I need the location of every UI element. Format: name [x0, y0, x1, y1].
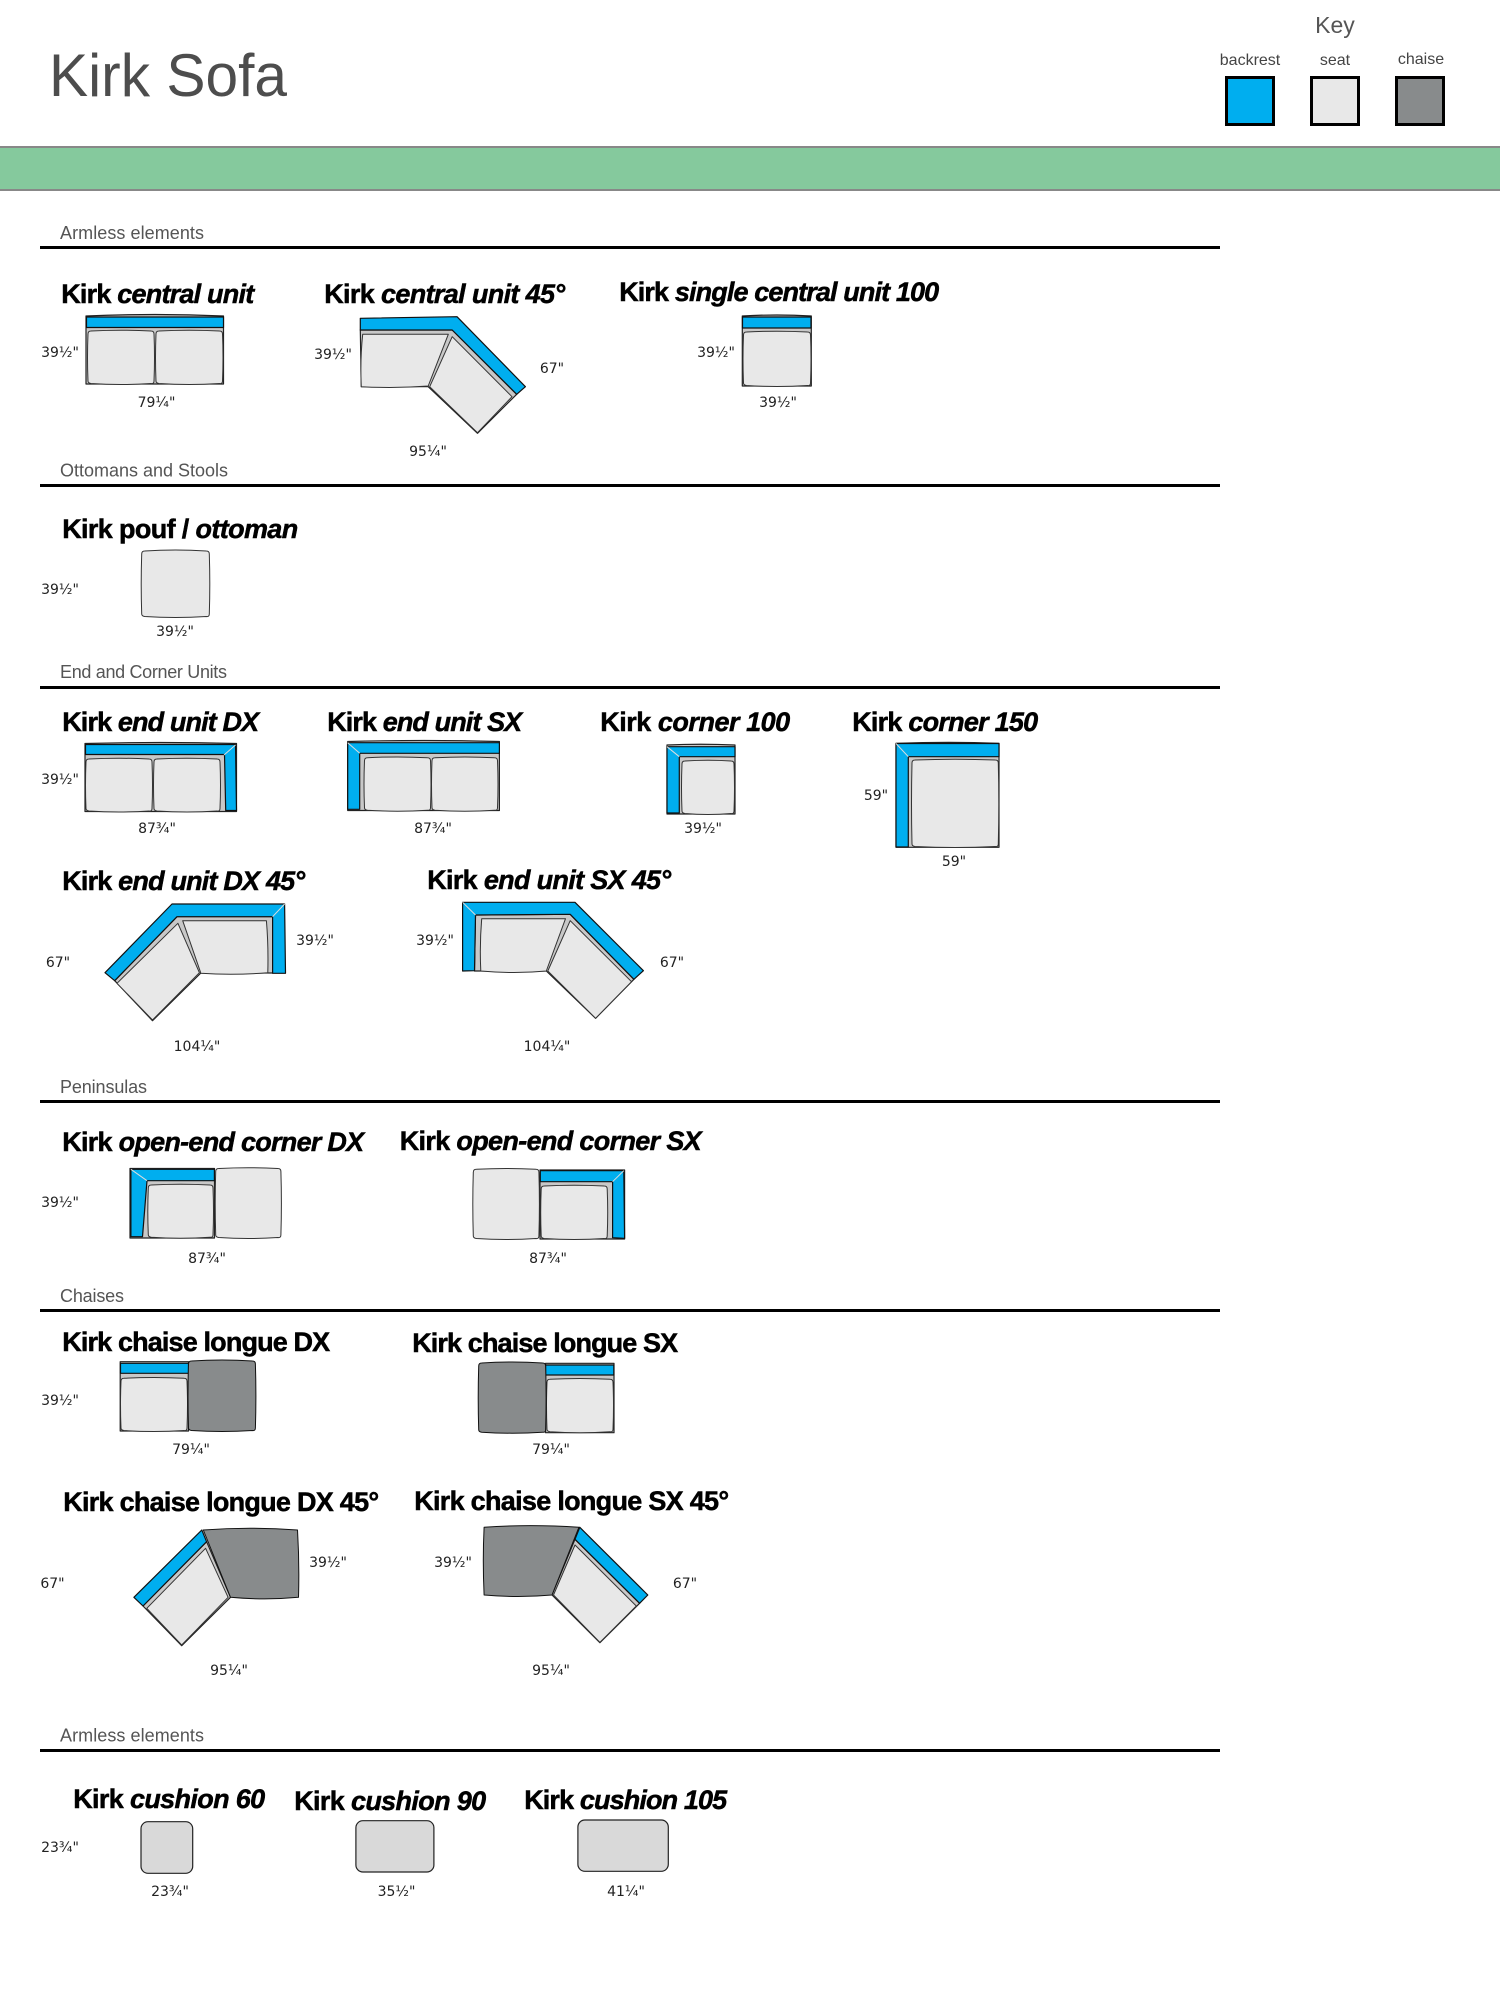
depth: 59"	[864, 788, 888, 804]
depth: 23¾"	[41, 1840, 79, 1856]
unit name: Kirk cushion 60	[73, 1784, 265, 1814]
depth: 39½"	[697, 345, 735, 361]
sofa plan	[348, 740, 499, 811]
unit: Kirk central unit 45	[314, 279, 565, 460]
width: 87¾"	[414, 821, 452, 837]
unit: Kirk corner 100	[600, 707, 790, 837]
unit: Kirk chaise longue DX	[41, 1327, 330, 1458]
sofa plan	[120, 1360, 256, 1432]
width: 79¼"	[532, 1442, 570, 1458]
unit name: Kirk chaise longue DX	[62, 1327, 330, 1357]
unit name: Kirk central unit	[61, 279, 255, 309]
unit name: Kirk end unit SX	[327, 707, 524, 737]
diagonal: 67"	[660, 955, 684, 971]
cushion plan	[141, 1822, 193, 1873]
key label: backrest: backrest	[1220, 52, 1281, 69]
unit: Kirk cushion 90	[294, 1786, 486, 1900]
depth: 39½"	[434, 1555, 472, 1571]
unit name: Kirk end unit SX 45°	[427, 865, 671, 895]
key label: chaise: chaise	[1398, 51, 1444, 68]
unit name: Kirk chaise longue DX 45°	[63, 1487, 379, 1517]
section heading: Armless elements: Armless elements	[60, 223, 204, 243]
unit name: Kirk cushion 90	[294, 1786, 486, 1816]
sofa plan	[134, 1528, 299, 1646]
sofa plan	[667, 744, 735, 814]
unit: Kirk end unit DX	[41, 707, 261, 837]
width: 104¼"	[174, 1039, 220, 1055]
unit: Kirk central unit	[41, 279, 255, 411]
unit name: Kirk chaise longue SX 45°	[414, 1486, 729, 1516]
unit: Kirk end unit SX	[327, 707, 524, 837]
depth: 39½"	[416, 933, 454, 949]
key swatch: backrest	[1226, 78, 1274, 124]
unit: Kirk chaise longue SX 45	[414, 1486, 729, 1679]
unit name: Kirk end unit DX	[62, 707, 261, 737]
cushion plan	[578, 1820, 668, 1871]
width: 95¼"	[532, 1663, 570, 1679]
depth: 39½"	[309, 1555, 347, 1571]
width: 23¾"	[151, 1884, 189, 1900]
unit: Kirk cushion 105	[524, 1785, 728, 1900]
unit: Kirk end unit DX 45	[46, 866, 334, 1055]
depth: 39½"	[314, 347, 352, 363]
width: 39½"	[759, 395, 797, 411]
unit name: Kirk single central unit 100	[619, 277, 939, 307]
unit: Kirk single central unit 100	[619, 277, 939, 411]
diagonal: 67"	[673, 1576, 697, 1592]
diagonal: 67"	[540, 361, 564, 377]
unit: Kirk end unit SX 45	[416, 865, 684, 1055]
unit: Kirk cushion 60	[41, 1784, 265, 1900]
sofa plan	[360, 317, 525, 433]
section heading: Armless elements (cushions): Armless elements	[60, 1726, 204, 1746]
width: 87¾"	[138, 821, 176, 837]
section heading: Chaises: Chaises	[60, 1286, 124, 1306]
sofa plan	[483, 1526, 648, 1643]
sofa plan	[473, 1169, 625, 1240]
title: Kirk Sofa	[49, 42, 288, 109]
unit name: Kirk chaise longue SX	[412, 1328, 678, 1358]
depth: 39½"	[41, 345, 79, 361]
key swatch: chaise	[1396, 78, 1444, 124]
unit name: Kirk corner 150	[852, 707, 1038, 737]
sofa plan	[130, 1168, 281, 1238]
width: 95¼"	[210, 1663, 248, 1679]
section heading: Ottomans and Stools: Ottomans and Stools	[60, 461, 228, 481]
sofa plan	[86, 314, 224, 384]
unit name: Kirk cushion 105	[524, 1785, 728, 1815]
width: 95¼"	[409, 444, 447, 460]
sofa plan	[463, 902, 643, 1018]
unit name: Kirk open-end corner SX	[400, 1126, 704, 1156]
unit: Kirk chaise longue DX 45	[40, 1487, 379, 1679]
width: 104¼"	[524, 1039, 570, 1055]
sofa plan	[478, 1362, 614, 1433]
unit: Kirk open-end corner DX	[41, 1127, 366, 1267]
unit: Kirk open-end corner SX	[400, 1126, 704, 1267]
diagonal: 67"	[46, 955, 70, 971]
section heading: Peninsulas: Peninsulas	[60, 1077, 147, 1097]
pouf plan	[141, 550, 210, 618]
width: 39½"	[684, 821, 722, 837]
unit: Kirk corner 150	[852, 707, 1038, 870]
depth: 39½"	[41, 582, 79, 598]
key label: seat: seat	[1320, 52, 1351, 69]
unit: Kirk chaise longue SX	[412, 1328, 678, 1458]
width: 59"	[942, 854, 966, 870]
unit name: Kirk pouf / ottoman	[62, 514, 298, 544]
depth: 39½"	[41, 1393, 79, 1409]
sofa plan	[85, 742, 236, 812]
sofa plan	[742, 315, 811, 386]
unit name: Kirk central unit 45°	[324, 279, 565, 309]
section heading: End and Corner Units: End and Corner Units	[60, 662, 227, 682]
width: 35½"	[378, 1884, 415, 1900]
unit name: Kirk corner 100	[600, 707, 790, 737]
sofa plan	[896, 742, 999, 848]
depth: 39½"	[41, 772, 79, 788]
width: 87¾"	[188, 1251, 226, 1267]
cushion plan	[356, 1821, 434, 1872]
width: 87¾"	[529, 1251, 567, 1267]
sofa plan	[105, 904, 286, 1021]
key swatch: seat	[1312, 78, 1358, 124]
unit name: Kirk end unit DX 45°	[62, 866, 305, 896]
width: 41¼"	[607, 1884, 645, 1900]
green banner	[0, 147, 1500, 190]
unit name: Kirk open-end corner DX	[62, 1127, 366, 1157]
legend: key	[1220, 12, 1444, 124]
width: 39½"	[156, 624, 194, 640]
width: 79¼"	[138, 395, 175, 411]
depth: 39½"	[41, 1195, 79, 1211]
key heading: Key	[1315, 12, 1355, 38]
depth: 39½"	[296, 933, 334, 949]
width: 79¼"	[172, 1442, 210, 1458]
unit: Kirk pouf / ottoman	[41, 514, 298, 640]
diagonal: 67"	[40, 1576, 65, 1592]
